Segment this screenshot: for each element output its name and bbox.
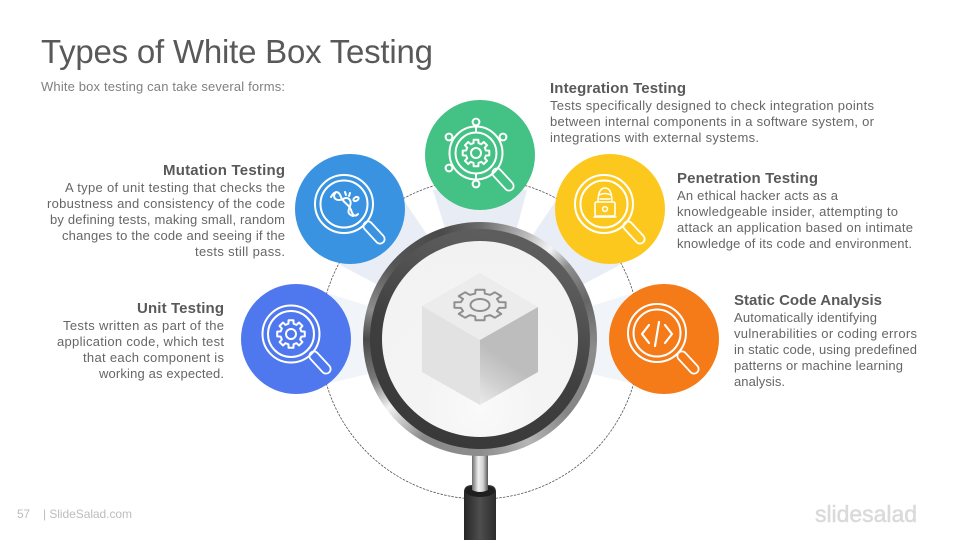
- text: static code analysis: in static code, using predefined: [734, 342, 917, 357]
- icon: code brackets: [642, 322, 672, 346]
- text: mutation testing: by defining tests, making small, random: [50, 212, 285, 227]
- footer: page number and site: 57: [17, 507, 30, 521]
- text: mutation testing: changes to the code and seeing if the: [62, 228, 285, 243]
- dark inner ring: [370, 229, 590, 449]
- text: unit testing: Tests written as part of the: [63, 318, 224, 333]
- text: mutation testing: robustness and consistency of the code: [47, 196, 285, 211]
- text: integration testing: between internal components in a software system, or: [550, 114, 875, 129]
- icon: gear: [454, 290, 506, 320]
- light beams from the lens to the circles: [330, 190, 630, 383]
- text: unit testing: [57, 300, 224, 381]
- text: unit testing: working as expected.: [98, 366, 224, 381]
- text: mutation testing: Mutation Testing: [163, 162, 285, 179]
- text: static code analysis: [734, 292, 918, 389]
- circle: integration testing: [425, 100, 535, 210]
- text: integration testing: [550, 80, 875, 145]
- footer: page number and site: | SlideSalad.com: [43, 507, 132, 521]
- text: penetration testing: Penetration Testing: [677, 170, 818, 187]
- text: mutation testing: tests still pass.: [195, 244, 285, 259]
- text: penetration testing: An ethical hacker acts as a: [677, 188, 839, 203]
- text: integration testing: Integration Testing: [550, 80, 686, 97]
- text: static code analysis: analysis.: [734, 374, 785, 389]
- text: static code analysis: vulnerabilities or coding errors: [734, 326, 918, 341]
- icon: dna: [331, 192, 359, 216]
- text: mutation testing: A type of unit testing that checks the: [65, 180, 285, 195]
- text: penetration testing: knowledge of its code and environment.: [677, 236, 912, 251]
- text: integration testing: integrations with external systems.: [550, 130, 759, 145]
- circle: unit testing: [241, 284, 351, 394]
- text: unit testing: that each component is: [83, 350, 224, 365]
- text: penetration testing: [677, 170, 913, 251]
- text: static code analysis: patterns or machine learning: [734, 358, 903, 373]
- dashed orbit: [320, 179, 640, 499]
- circle: penetration testing: [555, 154, 665, 264]
- text: unit testing: application code, which test: [57, 334, 224, 349]
- text: penetration testing: knowledgeable insider, attempting to: [677, 204, 898, 219]
- text: penetration testing: attack an application based on intimate: [677, 220, 913, 235]
- subtitle: White box testing can take several forms:: [41, 79, 285, 94]
- icon: hacker with laptop: [594, 188, 616, 217]
- text: unit testing: Unit Testing: [137, 300, 224, 317]
- text: static code analysis: Static Code Analysis: [734, 292, 882, 309]
- circle: static code analysis: [609, 284, 719, 394]
- text: static code analysis: Automatically identifying: [734, 310, 877, 325]
- text: integration testing: Tests specifically designed to check integration points: [550, 98, 874, 113]
- icon: connection nodes: [446, 119, 506, 187]
- text: mutation testing: [47, 162, 285, 259]
- footer logo: slidesalad: [815, 501, 917, 527]
- circle: mutation testing: [295, 154, 405, 264]
- glass lens: [382, 241, 578, 437]
- magnifier metal ring: [363, 222, 597, 456]
- title: Types of White Box Testing: [41, 33, 433, 70]
